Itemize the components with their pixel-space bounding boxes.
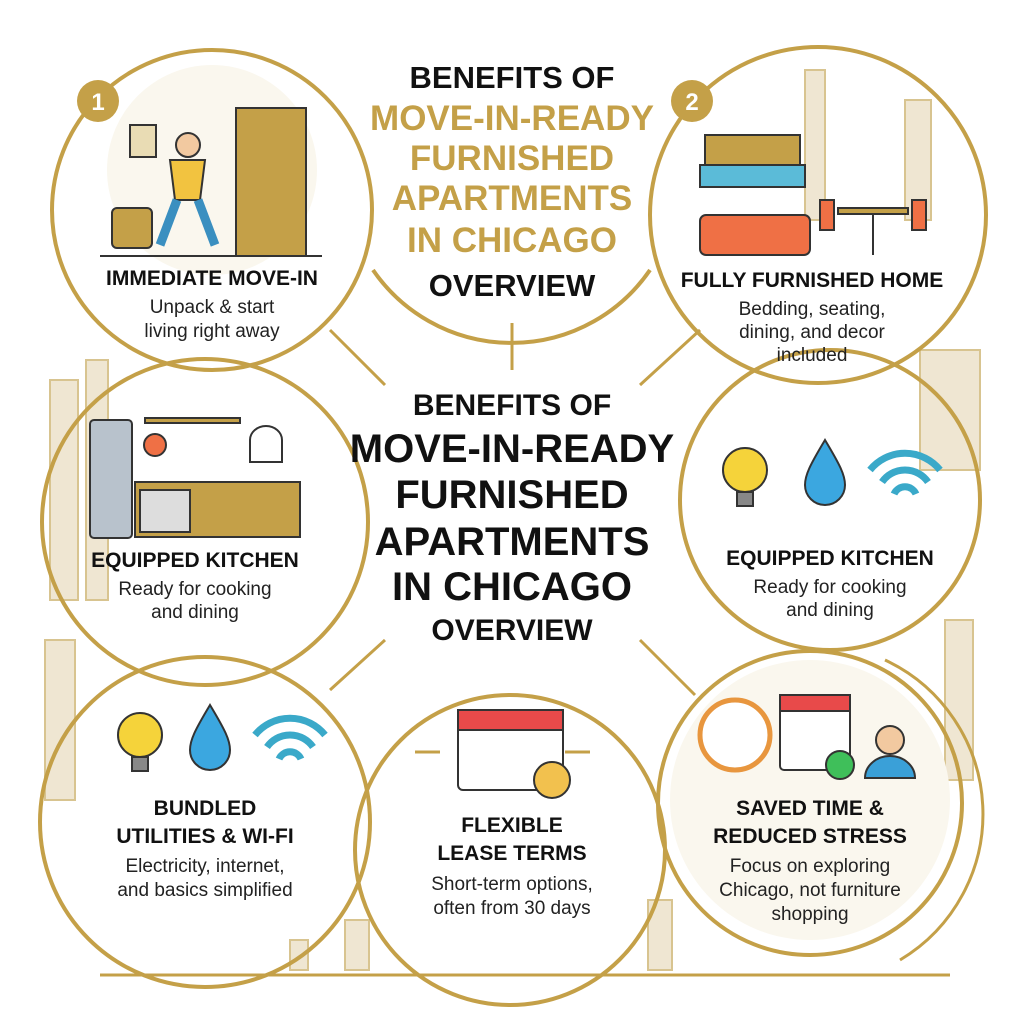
text: flexible lease <box>431 814 593 919</box>
text: bundled utilities: and basics simplified <box>117 880 293 901</box>
text: fully furnished home: Bedding, seating, <box>739 299 885 320</box>
text: equipped kitchen left <box>91 549 299 623</box>
icons: utilities right <box>723 440 940 506</box>
top title: FURNISHED <box>410 139 614 178</box>
text: equipped kitchen right: Ready for cooking <box>753 577 907 598</box>
badge 2: 2 <box>685 89 699 116</box>
text: equipped kitchen left: Ready for cooking <box>118 579 272 600</box>
text: equipped kitchen right: and dining <box>786 600 874 621</box>
central title: FURNISHED <box>395 473 629 517</box>
top title: OVERVIEW <box>429 268 596 303</box>
icons: clock calendar person <box>700 695 915 779</box>
text: flexible lease: Short-term options, <box>431 874 593 895</box>
text: immediate move-in: living right away <box>144 321 280 342</box>
text: equipped kitchen left: and dining <box>151 602 239 623</box>
text: immediate move-in: Unpack & start <box>150 297 275 318</box>
text: saved time: SAVED TIME & <box>736 797 884 820</box>
top title: APARTMENTS <box>392 179 632 218</box>
central title: OVERVIEW <box>431 614 593 647</box>
text: saved time: Focus on exploring <box>730 856 890 877</box>
connector lines <box>330 323 700 695</box>
badge 1 <box>77 80 119 122</box>
text: saved time: Chicago, not furniture <box>719 880 901 901</box>
icon: kitchen <box>90 418 300 538</box>
text: equipped kitchen left: EQUIPPED KITCHEN <box>91 549 299 572</box>
central title: BENEFITS OF <box>413 389 611 422</box>
text: fully furnished home: FULLY FURNISHED HOME <box>681 269 943 292</box>
top title: IN CHICAGO <box>407 221 617 260</box>
icon: person with suitcase and door <box>100 108 322 256</box>
central title: APARTMENTS <box>375 520 649 564</box>
text: saved time: shopping <box>771 904 849 925</box>
icons: utilities left <box>118 705 325 771</box>
text: bundled utilities <box>116 797 294 901</box>
badge 1: 1 <box>91 89 105 116</box>
text: bundled utilities: Electricity, internet, <box>125 856 285 877</box>
text: immediate move-in <box>106 267 318 342</box>
central title <box>350 389 675 647</box>
text: bundled utilities: BUNDLED <box>154 797 256 820</box>
text: flexible lease: often from 30 days <box>433 898 591 919</box>
text: equipped kitchen right: EQUIPPED KITCHEN <box>726 547 934 570</box>
central title: MOVE-IN-READY <box>350 427 675 471</box>
text: bundled utilities: UTILITIES & WI-FI <box>116 825 294 848</box>
text: saved time: REDUCED STRESS <box>713 825 907 848</box>
text: fully furnished home: included <box>777 345 847 366</box>
text: flexible lease: LEASE TERMS <box>437 842 587 865</box>
top title: MOVE-IN-READY <box>370 99 654 138</box>
text: flexible lease: FLEXIBLE <box>461 814 563 837</box>
text: equipped kitchen right <box>726 547 934 621</box>
text: fully furnished home: dining, and decor <box>739 322 886 343</box>
text: immediate move-in: IMMEDIATE MOVE-IN <box>106 267 318 290</box>
badge 2 <box>671 80 713 122</box>
top title: BENEFITS OF <box>410 60 614 95</box>
text: saved time <box>713 797 907 925</box>
central title: IN CHICAGO <box>392 565 632 609</box>
top title <box>370 60 654 303</box>
text: fully furnished home <box>681 269 943 366</box>
icon: calendar <box>415 710 590 798</box>
icon: furniture <box>700 135 926 255</box>
